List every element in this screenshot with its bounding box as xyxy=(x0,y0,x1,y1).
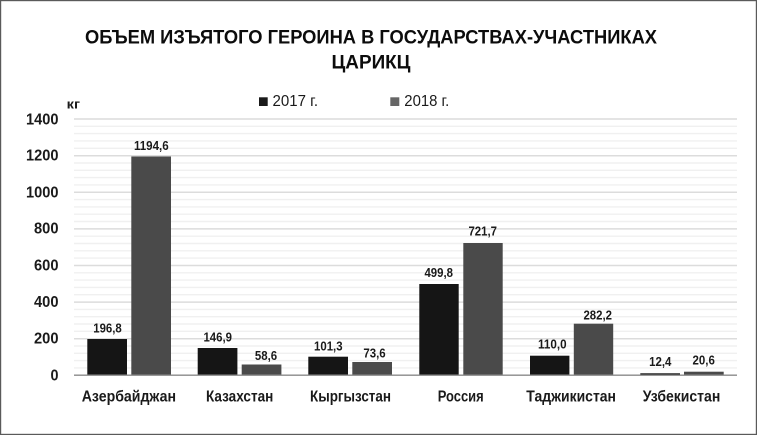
bars: Азербайджан: 196,8 xyxy=(93,322,122,336)
legend: 2017 г. xyxy=(272,93,318,110)
category labels: Таджикистан xyxy=(526,389,616,406)
category labels: Казахстан xyxy=(206,389,273,406)
bars: Кыргызстан: 73,6 xyxy=(363,347,386,361)
bars: Россия xyxy=(419,225,503,375)
bars: Кыргызстан xyxy=(308,339,392,375)
y axis labels: 1400 xyxy=(26,111,58,128)
y axis labels: 800 xyxy=(34,221,58,238)
legend xyxy=(259,93,449,110)
category labels: Россия xyxy=(438,389,484,406)
bars: Россия: 721,7 xyxy=(468,225,497,239)
legend: 2018 г. xyxy=(404,93,449,110)
bars: Азербайджан: 1194,6 xyxy=(134,139,169,153)
y axis labels: 400 xyxy=(34,294,58,311)
bars: Таджикистан: 282,2 xyxy=(583,309,612,323)
title: ОБЪЕМ ИЗЪЯТОГО ГЕРОИНА В ГОСУДАРСТВАХ-УЧАСТНИКАХ xyxy=(85,26,657,48)
category labels: Азербайджан xyxy=(82,389,176,406)
y axis labels: 1200 xyxy=(26,148,58,165)
bars: Азербайджан xyxy=(87,139,171,375)
y axis labels: 200 xyxy=(34,331,58,348)
category labels: Узбекистан xyxy=(643,389,720,406)
bars: Казахстан: 146,9 xyxy=(203,331,232,345)
y axis labels: 0 xyxy=(50,367,58,384)
category labels xyxy=(82,389,720,406)
bars: Казахстан: 58,6 xyxy=(255,349,277,363)
unit label: кг xyxy=(67,96,81,111)
bars: Таджикистан xyxy=(530,309,613,375)
title xyxy=(85,26,657,73)
y axis labels: 600 xyxy=(34,257,58,274)
x axis baseline xyxy=(74,374,737,376)
bars: Узбекистан: 12,4 xyxy=(649,355,671,369)
title: ЦАРИКЦ xyxy=(332,51,411,73)
bars: Узбекистан: 20,6 xyxy=(693,354,715,368)
bars: Таджикистан: 110,0 xyxy=(538,337,567,351)
bars: Узбекистан xyxy=(640,354,724,375)
bars: Кыргызстан: 101,3 xyxy=(314,339,343,353)
bars: Казахстан xyxy=(198,331,281,375)
y axis labels xyxy=(26,111,58,384)
bars: Россия: 499,8 xyxy=(424,266,453,280)
category labels: Кыргызстан xyxy=(310,389,391,406)
y axis labels: 1000 xyxy=(26,184,58,201)
